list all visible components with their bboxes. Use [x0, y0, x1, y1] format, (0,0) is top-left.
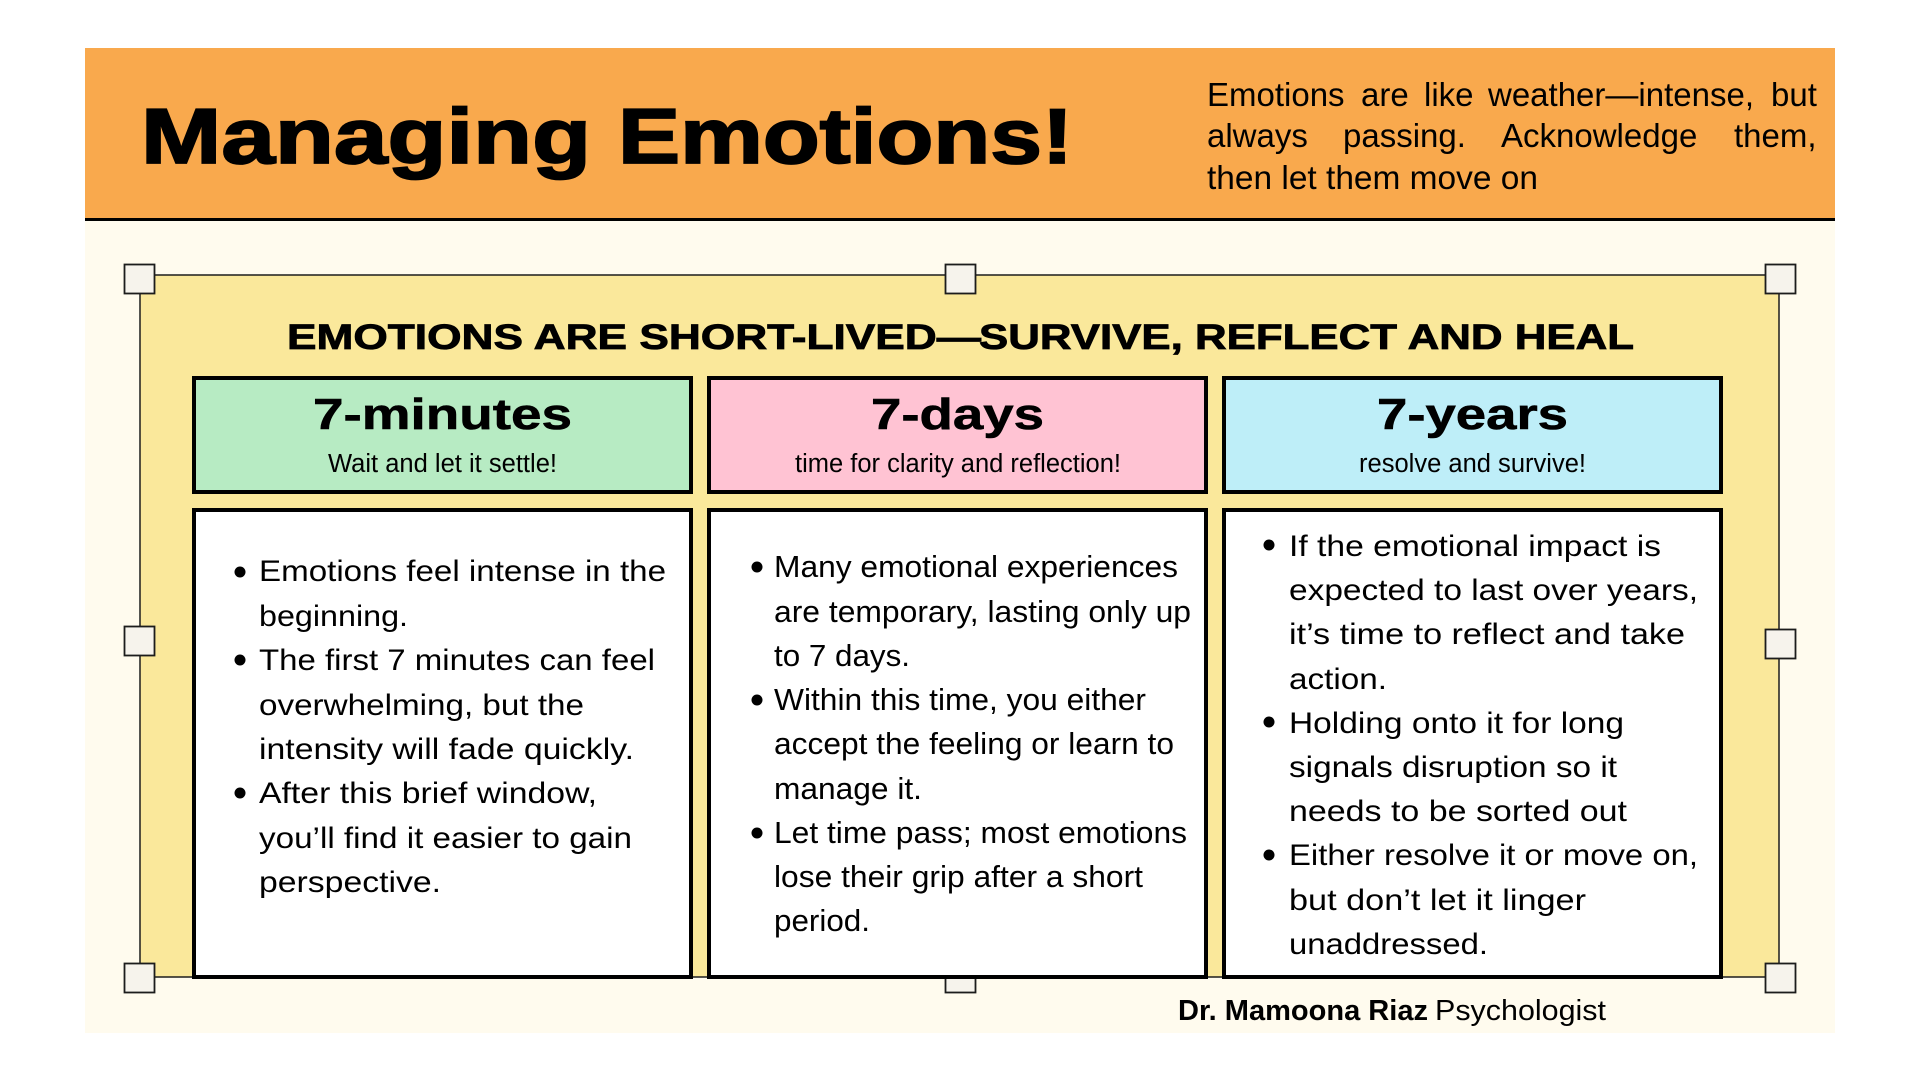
- bullet list: [234, 555, 666, 899]
- footer credit: [1178, 995, 1606, 1027]
- bullet list: overwhelming, but the: [259, 689, 584, 722]
- bullet list: Many emotional experiences: [774, 549, 1178, 584]
- bullet list: [752, 549, 1191, 938]
- header description: Acknowledge: [1501, 117, 1697, 154]
- header card: 7-days: 7-days: [871, 390, 1044, 439]
- header description: weather—intense,: [1487, 76, 1754, 113]
- panel: content background: [85, 221, 1835, 1033]
- bullet list: intensity will fade quickly.: [259, 733, 634, 766]
- section heading: [287, 318, 1634, 357]
- bullet list: accept the feeling or learn to: [774, 726, 1174, 761]
- header description: them,: [1734, 117, 1817, 154]
- body card: 7-minutes: [194, 510, 691, 977]
- header card: 7-minutes: Wait and let it settle!: [328, 450, 557, 478]
- title: Managing: [141, 92, 591, 180]
- bullet list: expected to last over years,: [1289, 574, 1698, 607]
- header description: are: [1361, 76, 1409, 113]
- bullet list: Let time pass; most emotions: [774, 815, 1187, 850]
- title: Emotions!: [618, 92, 1073, 180]
- header description: like: [1424, 76, 1474, 113]
- bullet list: beginning.: [259, 600, 408, 633]
- panel: header band: [85, 48, 1835, 221]
- header description: then let them move on: [1207, 159, 1538, 196]
- bullet list: lose their grip after a short: [774, 859, 1143, 894]
- bullet list: After this brief window,: [259, 777, 597, 810]
- bullet list: to 7 days.: [774, 638, 910, 673]
- title: [141, 92, 1073, 180]
- body card: 7-days: [709, 510, 1206, 977]
- body card: 7-years: [1224, 510, 1721, 977]
- bullet list: Either resolve it or move on,: [1289, 839, 1698, 872]
- bullet list: The first 7 minutes can feel: [259, 644, 655, 677]
- header card: 7-years: [1224, 378, 1721, 492]
- panel: yellow selection frame: [124, 264, 1796, 992]
- selection handles: [124, 264, 1796, 992]
- header card: 7-minutes: [194, 378, 691, 492]
- bullet list: needs to be sorted out: [1289, 795, 1628, 828]
- bullet list: perspective.: [259, 866, 441, 899]
- section heading: EMOTIONS ARE SHORT-LIVED—: [287, 318, 981, 357]
- header description: always: [1207, 117, 1308, 154]
- bullet list: you’ll find it easier to gain: [259, 822, 632, 855]
- footer credit: Dr. Mamoona Riaz: [1178, 995, 1428, 1027]
- header description: [1207, 76, 1817, 196]
- header card: 7-minutes: 7-minutes: [313, 390, 572, 439]
- bullet list: Holding onto it for long: [1289, 707, 1624, 740]
- bullet list: it’s time to reflect and take: [1289, 618, 1685, 651]
- bullet list: Emotions feel intense in the: [259, 555, 666, 588]
- footer credit: Psychologist: [1435, 995, 1606, 1027]
- bullet list: [1264, 530, 1698, 961]
- header description: but: [1771, 76, 1817, 113]
- header description: passing.: [1343, 117, 1466, 154]
- header card: 7-years: resolve and survive!: [1359, 450, 1586, 478]
- bullet list: action.: [1289, 663, 1387, 696]
- bullet list: period.: [774, 903, 870, 938]
- bullet list: signals disruption so it: [1289, 751, 1618, 784]
- section heading: SURVIVE, REFLECT AND HEAL: [979, 318, 1634, 357]
- header card: 7-days: [709, 378, 1206, 492]
- bullet list: but don’t let it linger: [1289, 884, 1586, 917]
- bullet list: If the emotional impact is: [1289, 530, 1661, 563]
- bullet list: are temporary, lasting only up: [774, 594, 1191, 629]
- bullet list: manage it.: [774, 771, 922, 806]
- header description: Emotions: [1207, 76, 1345, 113]
- bullet list: unaddressed.: [1289, 928, 1488, 961]
- header card: 7-years: 7-years: [1377, 390, 1568, 439]
- bullet list: Within this time, you either: [774, 682, 1146, 717]
- header card: 7-days: time for clarity and reflection!: [795, 450, 1121, 478]
